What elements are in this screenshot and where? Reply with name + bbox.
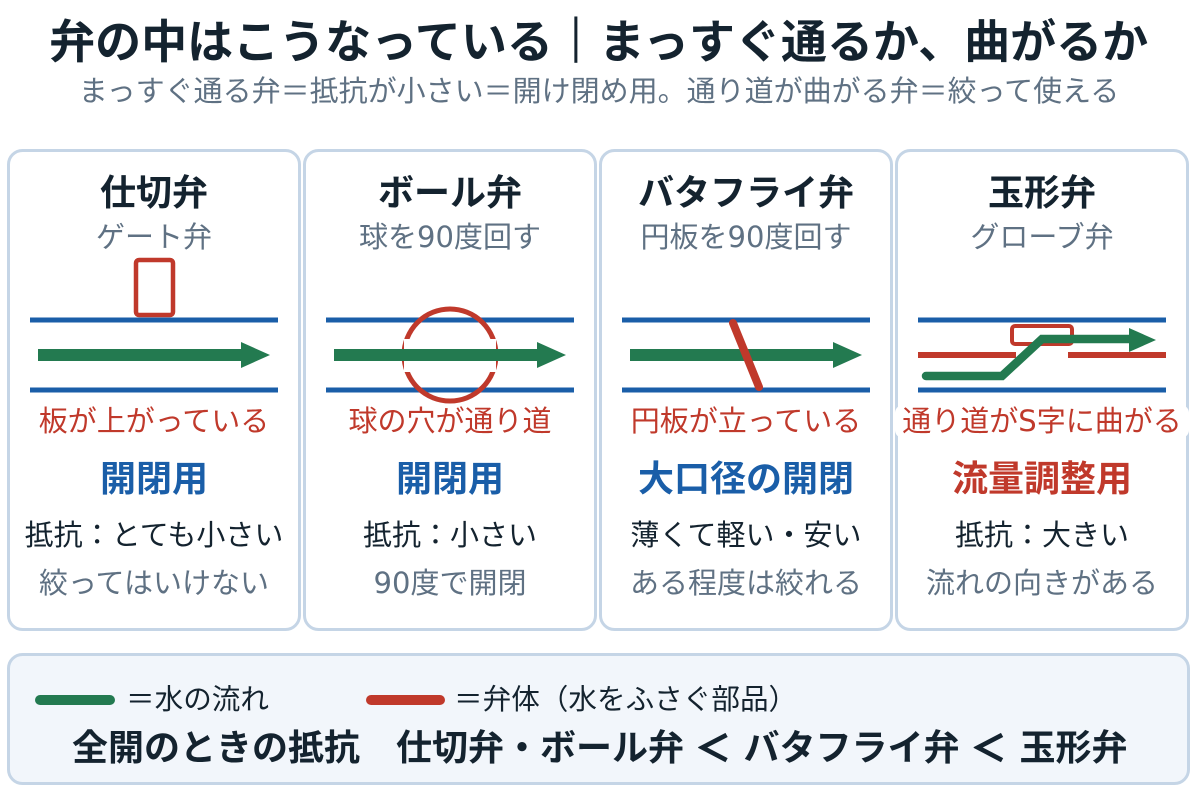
- detail: ball valve operation: 90度で開閉: [374, 566, 526, 600]
- resistance comparison: [72, 728, 1128, 770]
- detail: butterfly valve merits: 薄くて軽い・安い: [630, 518, 862, 552]
- detail: globe valve resistance: 抵抗：大きい: [955, 518, 1129, 552]
- subtitle: まっすぐ通る弁＝抵抗が小さい＝開け閉め用。通り道が曲がる弁＝絞って使える: [79, 74, 1119, 108]
- note: globe valve state: 通り道がS字に曲がる: [902, 404, 1182, 438]
- resistance comparison: 全開のときの抵抗 仕切弁・ボール弁: [72, 728, 684, 769]
- usage: ball valve: 開閉用: [396, 459, 504, 500]
- legend: water flow: ＝水の流れ: [126, 682, 269, 716]
- diagram: ball valve: [326, 309, 574, 401]
- detail: gate valve resistance: 抵抗：とても小さい: [25, 518, 283, 552]
- subheading: gate valve: ゲート弁: [96, 220, 212, 254]
- note: gate valve state: 板が上がっている: [39, 404, 269, 438]
- panel: ball valve: [304, 150, 596, 630]
- title: 弁の中はこうなっている: [49, 15, 553, 69]
- panel: butterfly valve: [600, 150, 892, 630]
- subheading: ball valve: 球を90度回す: [359, 220, 541, 254]
- detail: globe valve direction: 流れの向きがある: [926, 566, 1158, 600]
- title: まっすぐ通るか、曲がるか: [599, 15, 1148, 69]
- title: [49, 15, 1148, 69]
- panel: legend: [8, 654, 1188, 784]
- note: ball valve state: 球の穴が通り道: [348, 404, 552, 438]
- diagram: globe valve: [918, 320, 1166, 390]
- note: butterfly valve state: 円板が立っている: [631, 404, 861, 438]
- usage: butterfly valve: 大口径の開閉: [638, 459, 854, 500]
- usage: globe valve: 流量調整用: [952, 459, 1132, 500]
- detail: butterfly valve throttling: ある程度は絞れる: [630, 566, 862, 600]
- title: │: [564, 16, 588, 63]
- detail: ball valve resistance: 抵抗：小さい: [363, 518, 537, 552]
- subheading: butterfly valve: 円板を90度回す: [641, 220, 851, 254]
- diagram: gate valve: [30, 260, 278, 390]
- detail: gate valve caution: 絞ってはいけない: [39, 566, 269, 600]
- resistance comparison: 玉形弁: [1019, 728, 1128, 769]
- heading: ball valve: ボール弁: [378, 173, 522, 214]
- usage: gate valve: 開閉用: [100, 459, 208, 500]
- panel: globe valve: [895, 150, 1189, 630]
- panel: gate valve: [8, 150, 300, 630]
- resistance comparison: バタフライ弁: [743, 728, 960, 769]
- resistance comparison: ＜: [970, 729, 1007, 770]
- diagram: butterfly valve: [622, 320, 870, 390]
- resistance comparison: ＜: [695, 729, 731, 770]
- subheading: globe valve: グローブ弁: [970, 220, 1114, 254]
- heading: globe valve: 玉形弁: [988, 173, 1096, 214]
- heading: gate valve: 仕切弁: [100, 173, 208, 214]
- heading: butterfly valve: バタフライ弁: [638, 173, 854, 214]
- legend: valve body: ＝弁体（水をふさぐ部品）: [454, 682, 797, 716]
